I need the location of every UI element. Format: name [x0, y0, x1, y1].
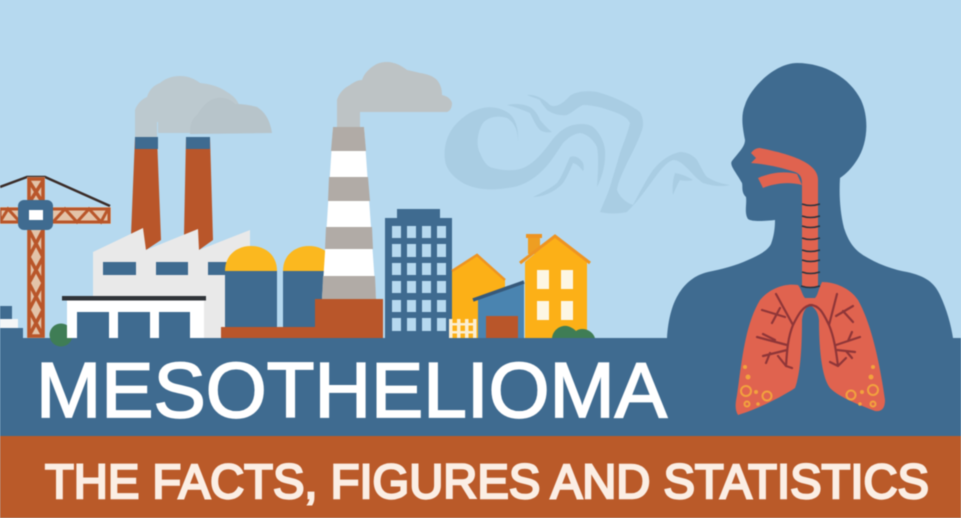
hedge: [552, 326, 595, 338]
lungs: [736, 282, 885, 415]
blue annex: [473, 282, 524, 338]
left edge building: [0, 306, 23, 338]
subtitle: THE FACTS, FIGURES AND STATISTICS: [45, 456, 929, 509]
title: MESOTHELIOMA: [36, 346, 667, 434]
smoke wisp: [445, 91, 730, 214]
bush: [50, 324, 72, 346]
crane: [0, 177, 111, 338]
striped chimney smoke: [337, 62, 452, 127]
airway: [751, 148, 820, 288]
person silhouette: [667, 63, 953, 436]
tall orange house: [520, 234, 590, 338]
office tower: [385, 209, 452, 338]
ground band: [0, 338, 961, 436]
small orange house: [452, 254, 505, 338]
silos: [221, 246, 335, 338]
factory: [62, 228, 250, 338]
striped chimney: [315, 127, 383, 338]
fence: [449, 319, 476, 338]
smoke clouds: [135, 76, 240, 138]
left factory chimneys: [131, 137, 213, 250]
subtitle bar: [0, 436, 961, 518]
